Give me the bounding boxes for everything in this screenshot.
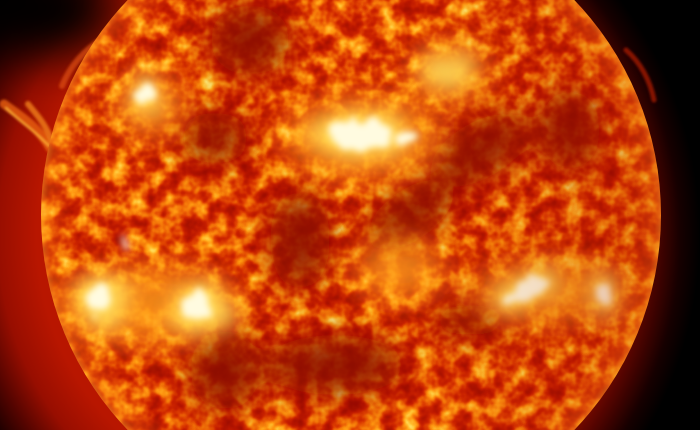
dark coronal regions bbox=[181, 5, 600, 410]
white-hot flare highlights bbox=[89, 83, 611, 320]
warm active regions bbox=[60, 44, 630, 343]
bright flare cores bbox=[78, 56, 617, 334]
right-side shading bbox=[461, 0, 661, 430]
solar prominence on left limb bbox=[4, 38, 654, 148]
dark sky at top left bbox=[0, 0, 115, 55]
